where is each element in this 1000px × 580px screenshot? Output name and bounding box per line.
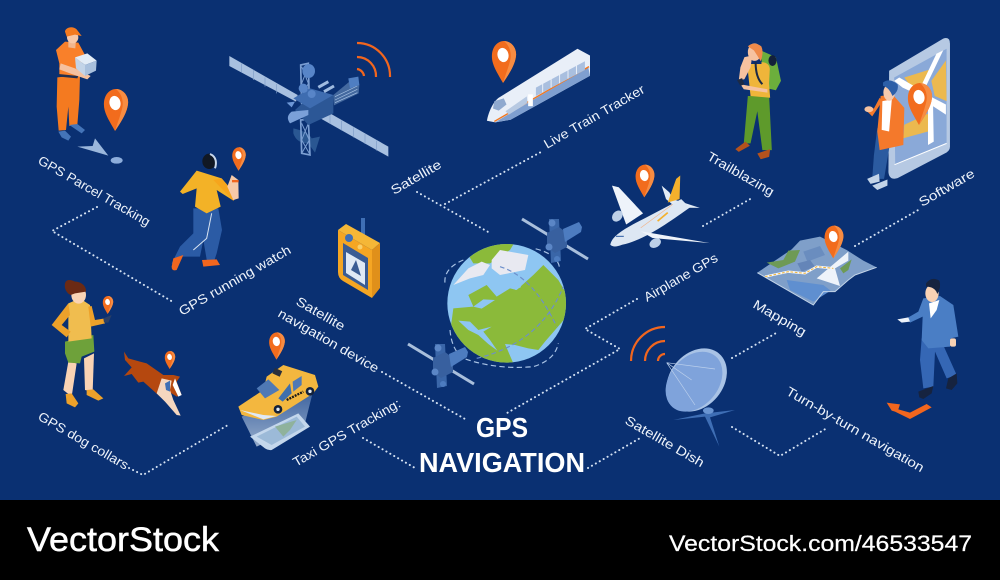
icon: folded map (757, 237, 877, 305)
footer logo: VectorStock (27, 521, 220, 559)
icon: dog (124, 352, 182, 416)
label: Taxi GPS Tracking: Taxi GPS Tracking: (290, 396, 403, 470)
icon: satellite dish (654, 336, 739, 447)
label: GPS Parcel Tracking: GPS Parcel Tracking (36, 153, 153, 229)
icon: woman (52, 280, 112, 407)
icon: map pin, woman (103, 296, 113, 314)
icon: GPS device (338, 218, 380, 298)
label: Live Train Tracker: Live Train Tracker (541, 81, 648, 152)
label: Satellite: Satellite (388, 157, 444, 198)
icon: courier with parcel (56, 27, 97, 141)
label: Satellite navigation device: Satellite (294, 294, 348, 334)
icon: small satellite bottom (408, 344, 474, 388)
label: Trailblazing: Trailblazing (704, 149, 777, 199)
icon: train (487, 49, 590, 122)
icon: businessman (887, 279, 958, 419)
icon: map pin, software (908, 83, 932, 125)
icon: airplane (610, 175, 710, 250)
title: NAVIGATION (419, 447, 585, 478)
dotted connector lines (52, 152, 920, 475)
label: Satellite navigation device (276, 294, 382, 376)
icon: map pin, runner (232, 147, 246, 171)
icon: map pin, airplane (636, 165, 654, 197)
icon: signal arcs (357, 43, 390, 77)
icon: satellite (229, 56, 388, 157)
icon: map pin, taxi (269, 332, 285, 360)
title (419, 412, 585, 478)
icon: map pin, dog (165, 351, 175, 369)
footer url: VectorStock.com/46533547 (669, 531, 972, 556)
label: Satellite Dish: Satellite Dish (622, 413, 707, 470)
footer bar (0, 500, 1000, 580)
label: Turn-by-turn navigation: Turn-by-turn navigation (784, 384, 927, 475)
label: Software: Software (916, 166, 977, 210)
icon: taxi (238, 365, 318, 450)
icon: small satellite top (522, 219, 588, 263)
icon: dish signal arcs (631, 327, 665, 361)
icon: navigation arrow (77, 138, 123, 164)
icon: runner (172, 154, 239, 270)
icon: map pin, train (492, 41, 516, 83)
icon: hiker (735, 43, 781, 159)
label: Mapping: Mapping (750, 297, 809, 339)
title: GPS (476, 412, 528, 443)
label: GPS running watch: GPS running watch (176, 242, 293, 319)
globe with orbits (445, 242, 570, 367)
label: GPS dog collars: GPS dog collars (36, 409, 132, 473)
label: Airplane GPs: Airplane GPs (641, 250, 721, 305)
label: Satellite navigation device: navigation device (276, 306, 382, 376)
icon: tablet and user (864, 38, 950, 190)
icon: map pin, parcel (104, 89, 128, 131)
icon: map pin, mapping (825, 226, 843, 258)
